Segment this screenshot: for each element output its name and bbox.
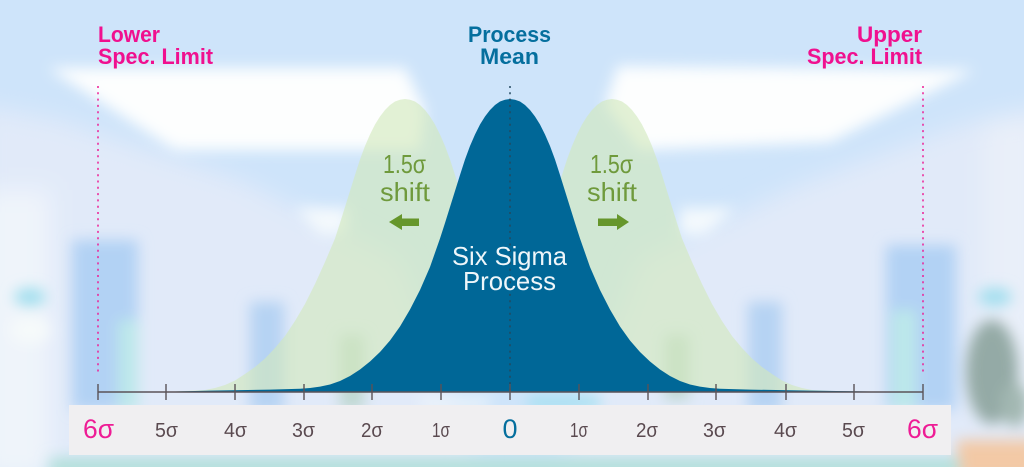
right sigma labels: 2σ bbox=[636, 420, 659, 442]
right sigma labels bbox=[570, 420, 866, 442]
heading: lower spec limit bbox=[98, 22, 214, 69]
left sigma labels bbox=[155, 420, 451, 442]
sigma scale band bbox=[69, 405, 951, 455]
left shift label: 1.5σ bbox=[383, 149, 426, 179]
left shifted green curve bbox=[175, 99, 520, 392]
label: six sigma process: Process bbox=[463, 266, 556, 296]
left shift label bbox=[380, 149, 431, 207]
left sigma labels: 4σ bbox=[224, 420, 248, 442]
label: six sigma process: Six Sigma bbox=[452, 241, 568, 271]
upper spec limit dotted line bbox=[922, 86, 924, 375]
right shift label: shift bbox=[587, 177, 638, 207]
heading: upper spec limit: Spec. Limit bbox=[807, 44, 923, 69]
label: six sigma process bbox=[452, 241, 568, 296]
lower spec limit dotted line bbox=[97, 86, 99, 375]
right shifted green curve bbox=[500, 99, 842, 392]
right sigma labels: 1σ bbox=[570, 420, 589, 442]
label: zero: 0 bbox=[502, 414, 518, 444]
icon: left arrow bbox=[389, 214, 419, 230]
left shift label: shift bbox=[380, 177, 431, 207]
heading: lower spec limit: Lower bbox=[98, 22, 160, 47]
heading: process mean bbox=[468, 22, 551, 69]
label: right 6 sigma: 6σ bbox=[907, 414, 938, 444]
right sigma labels: 4σ bbox=[774, 420, 798, 442]
label: left 6 sigma: 6σ bbox=[83, 414, 114, 444]
left sigma labels: 5σ bbox=[155, 420, 179, 442]
heading: process mean: Mean bbox=[480, 44, 539, 69]
icon: right arrow bbox=[598, 214, 629, 230]
heading: process mean: Process bbox=[468, 22, 551, 47]
heading: upper spec limit: Upper bbox=[857, 22, 922, 47]
axis with sigma ticks bbox=[98, 384, 923, 400]
right sigma labels: 3σ bbox=[703, 420, 727, 442]
right shift label bbox=[587, 149, 638, 207]
left sigma labels: 3σ bbox=[292, 420, 316, 442]
process mean dotted line bbox=[509, 86, 511, 392]
heading: upper spec limit bbox=[807, 22, 923, 69]
left sigma labels: 2σ bbox=[361, 420, 384, 442]
left sigma labels: 1σ bbox=[432, 420, 451, 442]
central blue bell curve bbox=[98, 99, 923, 392]
right sigma labels: 5σ bbox=[842, 420, 866, 442]
right shift label: 1.5σ bbox=[590, 149, 633, 179]
heading: lower spec limit: Spec. Limit bbox=[98, 44, 214, 69]
